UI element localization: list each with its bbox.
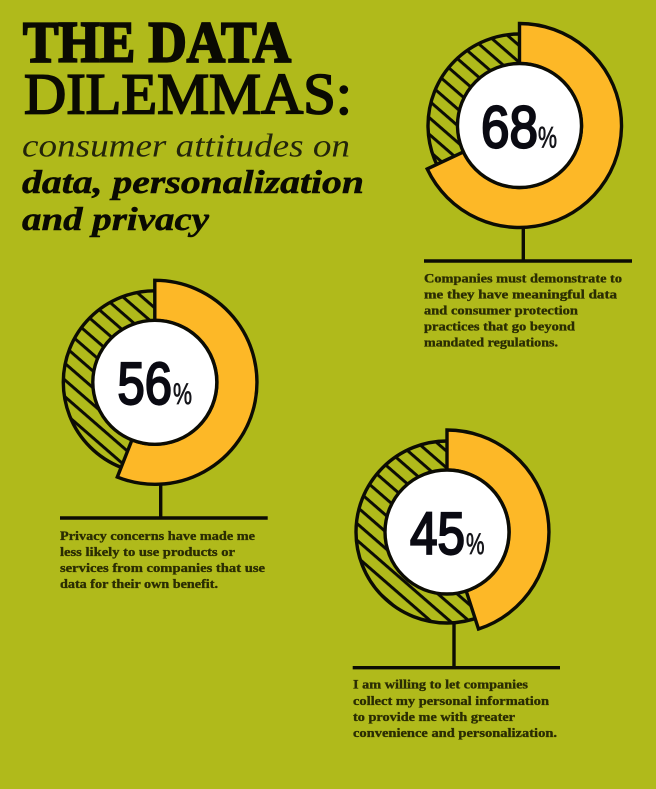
stem and rule <box>353 622 560 668</box>
chart: 45 percent <box>353 430 560 740</box>
white centre circle <box>458 64 582 188</box>
stem and rule <box>60 484 268 518</box>
chart: 56 percent <box>60 280 268 591</box>
subtitle line: consumer attitudes on: consumer attitudes on <box>22 128 350 164</box>
subtitle line: data, personalization: data, personalization <box>22 165 364 201</box>
caption: I am willing to let companies <box>353 676 528 692</box>
caption: me they have meaningful data <box>424 286 618 302</box>
value: 56%: 56 <box>118 351 172 417</box>
hatched remainder ring <box>63 291 246 474</box>
caption: data for their own benefit. <box>60 576 218 591</box>
white centre circle <box>385 470 509 594</box>
heading line: DILEMMAS: DILEMMAS: <box>24 62 352 126</box>
caption: and consumer protection <box>424 302 579 318</box>
orange ring segment <box>427 24 622 228</box>
caption: Companies must demonstrate to <box>424 270 622 286</box>
value: 68%: 68 <box>481 94 538 160</box>
value: 56%: % <box>173 378 192 411</box>
stem and rule <box>424 228 632 261</box>
value: 45%: 45 <box>410 501 465 567</box>
heading line: THE DATA: THE DATA <box>23 10 291 74</box>
white centre circle <box>93 320 217 444</box>
value: 45%: % <box>466 528 484 561</box>
caption <box>60 528 265 591</box>
caption: mandated regulations. <box>424 334 558 350</box>
caption <box>353 676 557 740</box>
hatched remainder ring <box>356 441 538 623</box>
value: 68%: % <box>538 122 557 154</box>
caption: practices that go beyond <box>424 318 576 334</box>
chart: 68 percent <box>424 24 632 350</box>
caption: services from companies that use <box>60 560 265 575</box>
hatched remainder ring <box>428 34 611 217</box>
orange ring segment <box>117 280 257 484</box>
caption: collect my personal information <box>353 693 550 708</box>
subtitle line: and privacy: and privacy <box>22 202 209 238</box>
caption: less likely to use products or <box>60 544 235 559</box>
caption: convenience and personalization. <box>353 725 557 740</box>
caption <box>424 270 622 350</box>
title <box>22 10 364 238</box>
caption: to provide me with greater <box>353 709 515 724</box>
orange ring segment <box>447 430 549 629</box>
caption: Privacy concerns have made me <box>60 528 255 543</box>
